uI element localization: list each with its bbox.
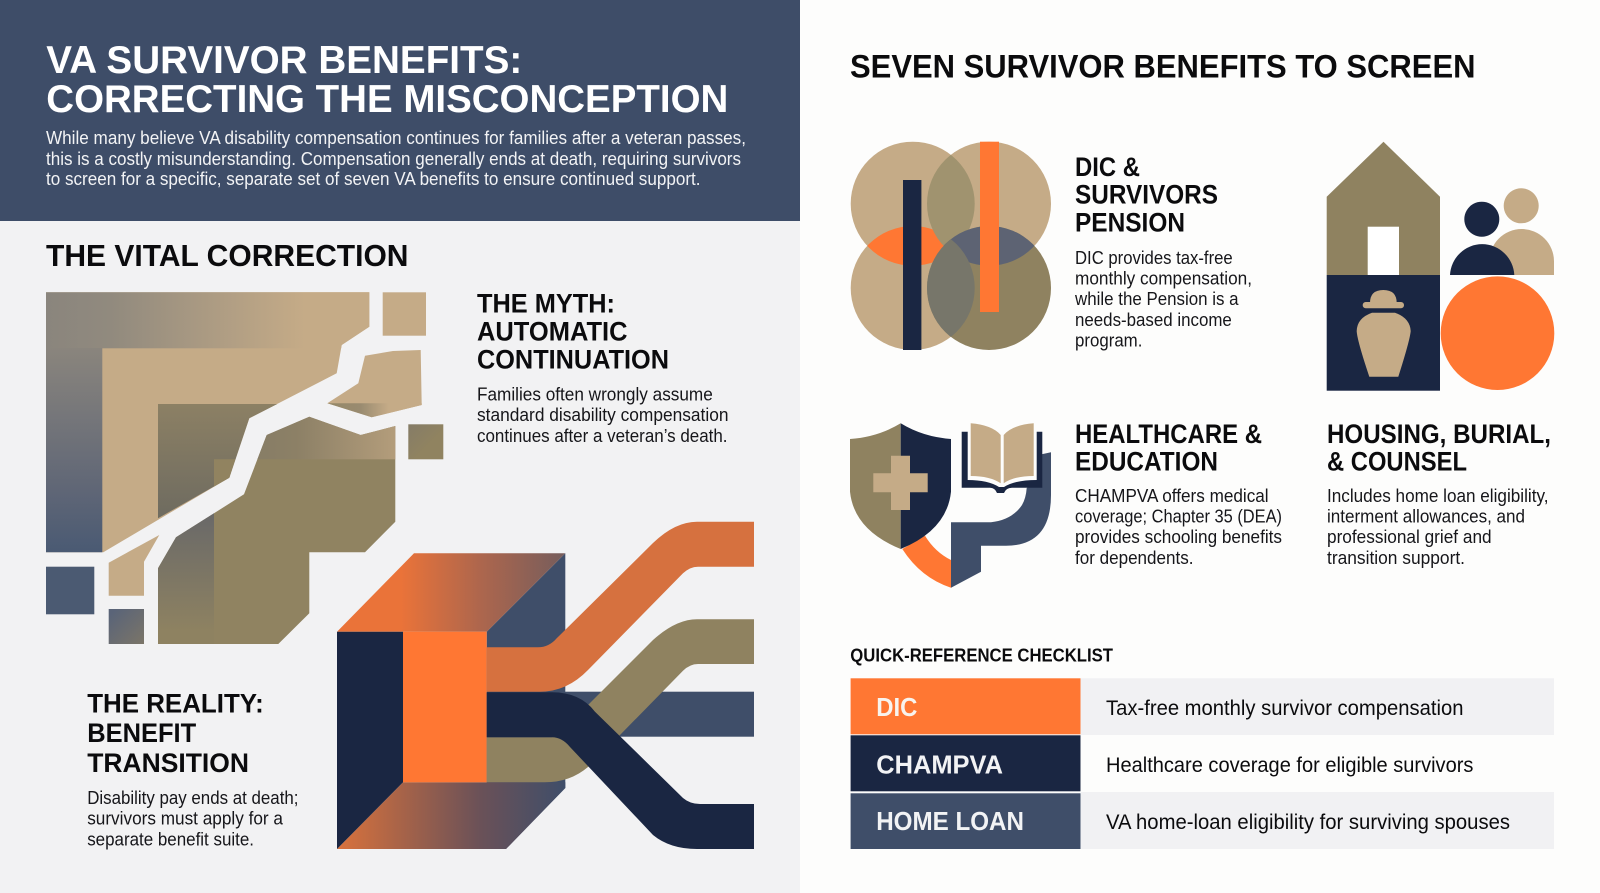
row: home loan: VA home-loan eligibility for surviving spouses [1106,811,1510,834]
intro text: to screen for a specific, separate set of seven VA benefits to ensure continued support. [46,168,700,189]
text block: housing, burial and counsel [1327,419,1551,568]
row: DIC: Tax-free monthly survivor compensation [1106,697,1464,720]
title: CORRECTING THE MISCONCEPTION [46,78,728,121]
text block: DIC and survivors pension: DIC & [1075,152,1140,182]
urn [1357,290,1411,377]
heading: quick-reference checklist: QUICK-REFERENCE CHECKLIST [850,646,1113,666]
intro text [46,127,746,189]
row: DIC: DIC [876,692,918,722]
text block: healthcare and education [1075,419,1282,568]
text block: healthcare and education: for dependents. [1075,548,1194,568]
text block: the myth: standard disability compensation [477,405,728,425]
graphic: box branching into benefit ribbons [337,522,754,849]
text block: the reality: Disability pay ends at death; [87,788,298,808]
row: CHAMPVA: CHAMPVA [876,749,1003,779]
text block: the reality: THE REALITY: [87,689,264,719]
text block: healthcare and education: CHAMPVA offers medical [1075,486,1269,506]
text block: the myth [477,289,728,446]
heading: seven survivor benefits: SEVEN SURVIVOR BENEFITS TO SCREEN [850,48,1476,84]
heading: the vital correction: THE VITAL CORRECTION [46,238,408,273]
ribbon: navy [487,692,754,849]
row: home loan: HOME LOAN [876,806,1024,836]
text block: DIC and survivors pension: needs-based income [1075,310,1232,330]
title: VA SURVIVOR BENEFITS: [46,39,522,82]
text block: the reality [87,689,298,850]
text block: DIC and survivors pension: DIC provides tax-free [1075,248,1233,268]
text block: DIC and survivors pension [1074,152,1252,351]
row: DIC [851,678,1464,734]
text block: healthcare and education: EDUCATION [1075,446,1218,476]
icon: shield and book [850,423,1051,588]
text block: DIC and survivors pension: program. [1075,331,1142,351]
header band [0,0,800,221]
text block: healthcare and education: coverage; Chapter 35 (DEA) [1075,507,1282,527]
row: CHAMPVA [851,735,1473,791]
ribbon: slate [565,692,754,737]
text block: the myth: Families often wrongly assume [477,384,713,404]
text block: the reality: TRANSITION [87,748,249,778]
text block: housing, burial and counsel: & COUNSEL [1327,446,1467,476]
table: quick-reference checklist [851,678,1554,849]
title [46,39,728,121]
text block: the myth: THE MYTH: [477,289,615,319]
row: home loan [851,793,1510,849]
intro text: this is a costly misunderstanding. Compensation generally ends at death, requiring survivors [46,148,741,169]
text block: DIC and survivors pension: while the Pension is a [1074,289,1240,309]
ribbon: olive [487,619,754,782]
text block: DIC and survivors pension: PENSION [1075,208,1185,238]
text block: DIC and survivors pension: monthly compensation, [1075,269,1252,289]
tan person [1489,188,1554,275]
text block: DIC and survivors pension: SURVIVORS [1075,180,1218,210]
text block: the reality: BENEFIT [87,718,197,748]
icon: house, urn and family [1327,142,1554,391]
row: CHAMPVA: Healthcare coverage for eligible survivors [1106,754,1473,777]
ribbon: orange [487,522,754,692]
text block: housing, burial and counsel: interment allowances, and [1327,507,1525,527]
text block: the reality: survivors must apply for a [87,808,284,828]
text block: the myth: CONTINUATION [477,344,669,374]
text block: healthcare and education: provides schooling benefits [1075,527,1282,547]
text block: the reality: separate benefit suite. [87,830,254,850]
graphic: fractured concentric squares [46,292,443,650]
navy person [1450,202,1514,275]
text block: housing, burial and counsel: transition support. [1327,548,1465,568]
text block: healthcare and education: HEALTHCARE & [1075,419,1262,449]
icon: overlapping circles for DIC and pension [851,142,1051,350]
text block: housing, burial and counsel: HOUSING, BURIAL, [1327,419,1551,449]
text block: housing, burial and counsel: Includes home loan eligibility, [1327,486,1548,506]
text block: housing, burial and counsel: professional grief and [1327,527,1492,547]
text block: the myth: continues after a veteran’s death. [477,426,728,446]
text block: the myth: AUTOMATIC [477,317,628,347]
intro text: While many believe VA disability compensation continues for families after a veteran passes, [46,127,746,148]
